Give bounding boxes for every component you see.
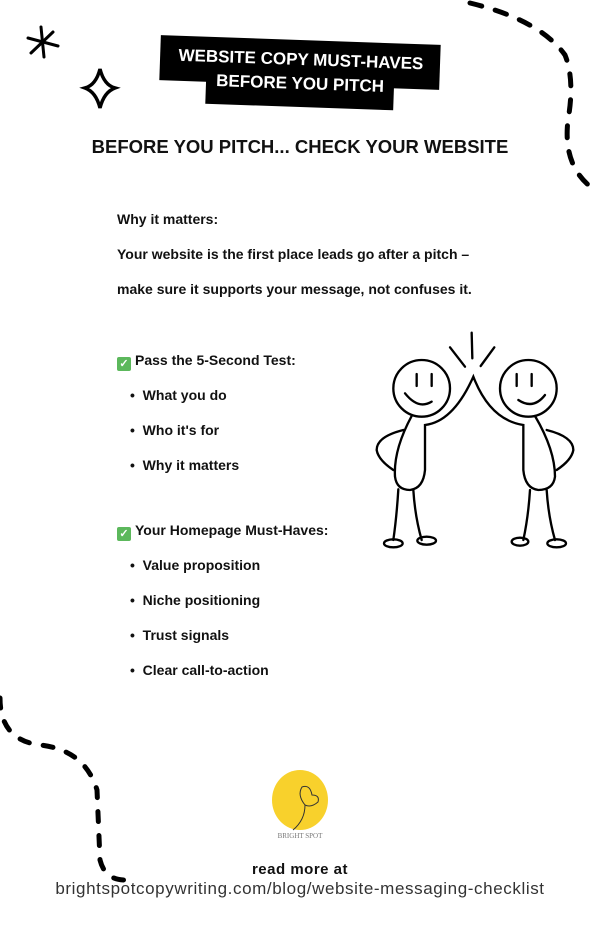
checklist: homepage must-haves: • Value proposition [130,557,260,573]
icon: asterisk [28,27,58,57]
checklist: homepage must-haves: • Trust signals [130,627,229,643]
subheading: BEFORE YOU PITCH... CHECK YOUR WEBSITE [92,136,508,157]
text block: why it matters: make sure it supports your message, not confuses it. [117,281,472,297]
checklist: 5-second test: Pass the 5-Second Test: [135,352,296,368]
checklist: homepage must-haves: ✓ [119,528,129,540]
title: BEFORE YOU PITCH [216,71,384,96]
footer: read more: read more at [252,861,348,878]
text block: why it matters [117,211,472,297]
checklist: 5-second test: ✓ [119,358,129,370]
logo: bright spot: BRIGHT SPOT [278,832,322,840]
text block: why it matters: Why it matters: [117,211,218,227]
checklist: 5-second test: • Who it's for [130,422,219,438]
title: WEBSITE COPY MUST-HAVES [178,46,424,73]
logo: bright spot [272,770,328,840]
checklist: 5-second test [117,352,296,473]
icon: sparkle [85,69,115,108]
checklist: 5-second test: • Why it matters [130,457,239,473]
checklist: 5-second test: • What you do [130,387,227,403]
checklist: homepage must-haves: Your Homepage Must-Haves: [135,522,328,538]
footer: url: brightspotcopywriting.com/blog/website-messaging-checklist [55,879,545,898]
checklist: homepage must-haves: • Niche positioning [130,592,260,608]
title [159,35,441,110]
checklist: homepage must-haves [117,522,328,678]
checklist: homepage must-haves: • Clear call-to-action [130,662,269,678]
text block: why it matters: Your website is the first place leads go after a pitch – [117,246,469,262]
illustration: stick figures high five [376,332,574,548]
